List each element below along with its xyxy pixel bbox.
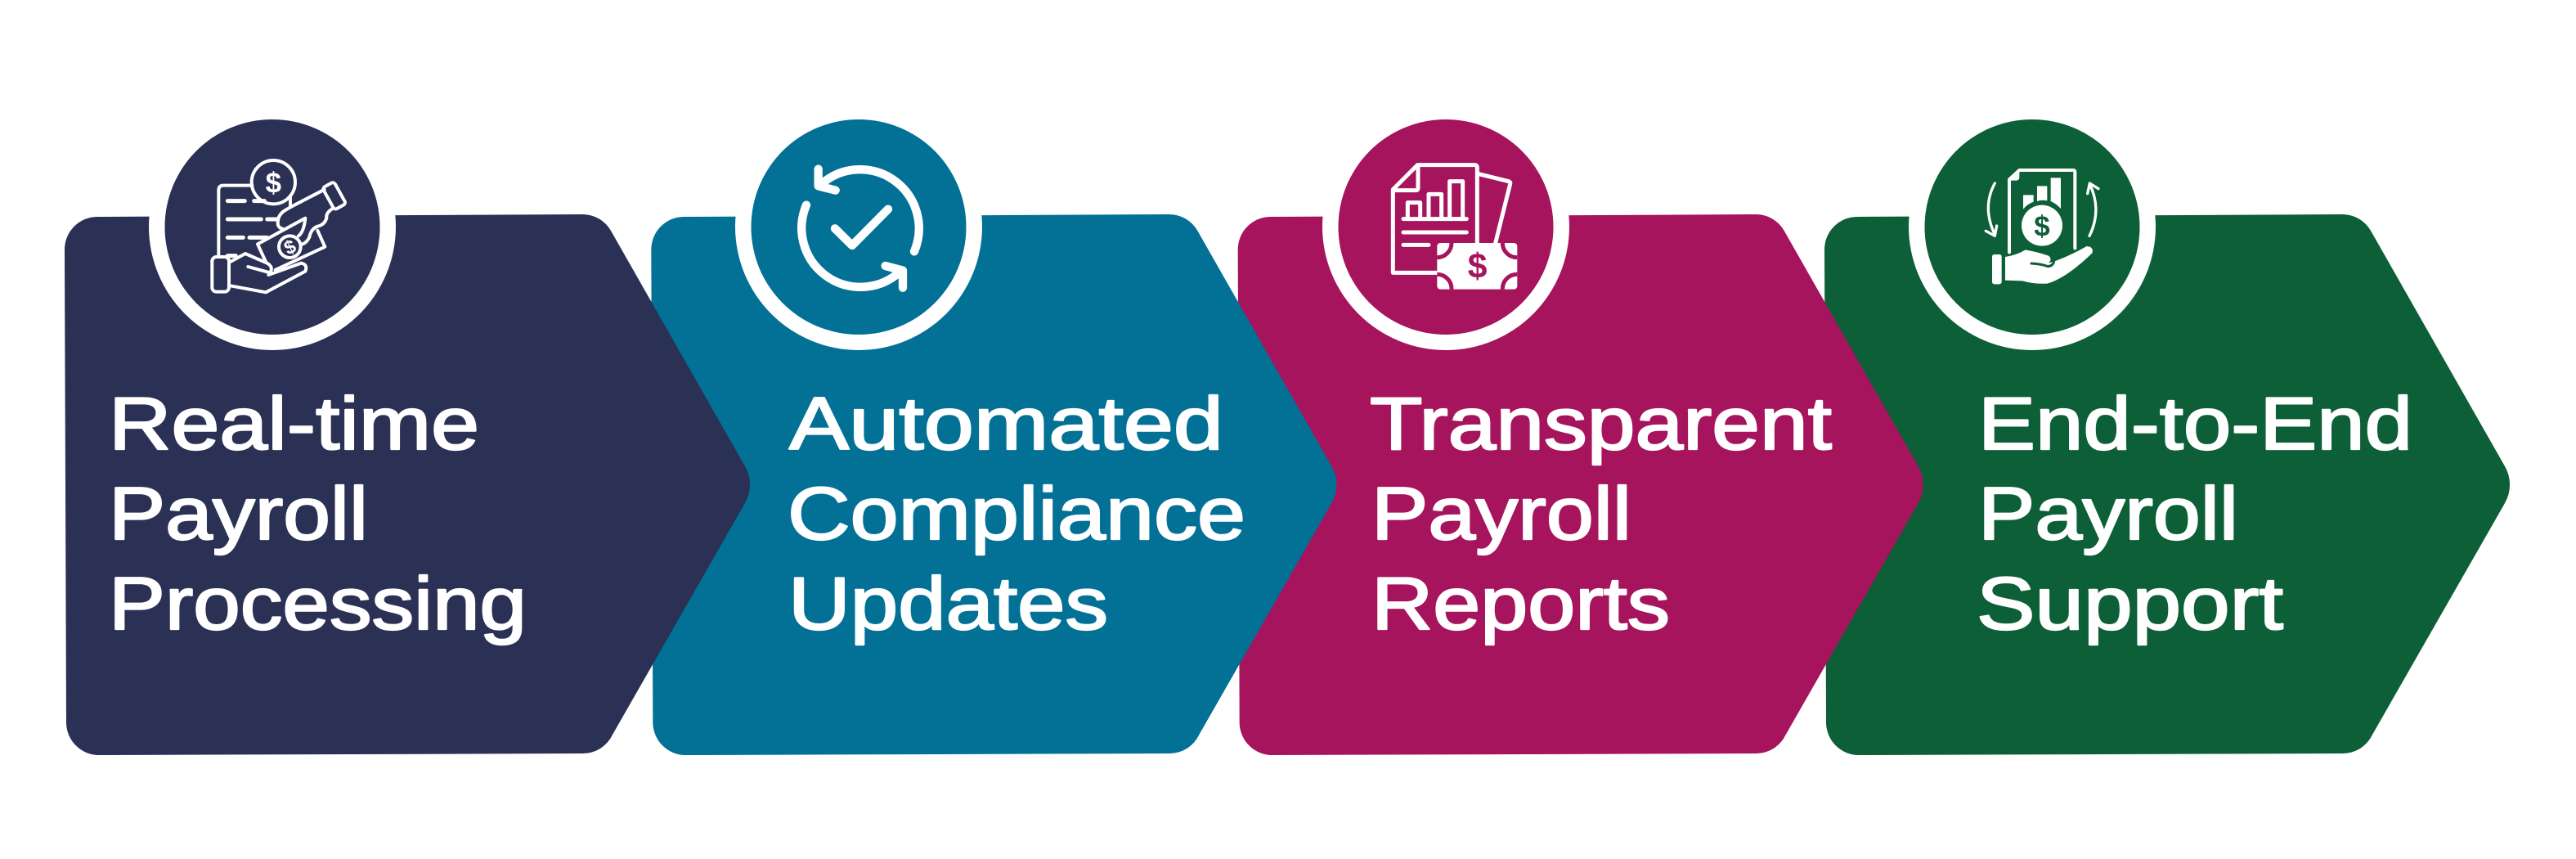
panel: Automated Compliance Updates — [651, 103, 1336, 755]
heading: Real-time Payroll Processing: Processing — [109, 563, 527, 645]
heading: Automated Compliance Updates: Automated — [789, 383, 1223, 465]
panel: Transparent Payroll Reports — [1238, 103, 1923, 755]
icon: circular arrows with check mark — [801, 169, 919, 288]
icon badge: compliance — [735, 103, 982, 350]
icon: payslip, coin and hands exchanging money: $ — [266, 167, 281, 199]
icon: payslip, coin and hands exchanging money: $ — [280, 235, 299, 259]
heading: Transparent Payroll Reports — [1370, 383, 1832, 645]
heading: Transparent Payroll Reports: Transparent — [1370, 383, 1832, 465]
heading: Automated Compliance Updates: Compliance — [788, 473, 1245, 555]
heading: Transparent Payroll Reports: Reports — [1371, 563, 1670, 645]
heading: Real-time Payroll Processing: Payroll — [109, 473, 368, 555]
heading: Real-time Payroll Processing — [109, 383, 527, 645]
icon: payslip, coin and hands exchanging money — [212, 160, 346, 292]
icon badge: support — [1909, 103, 2156, 350]
icon: report with bar chart and banknote — [1393, 165, 1517, 290]
icon: report and coin on open hand — [1986, 170, 2098, 284]
panel: End-to-End Payroll Support — [1824, 103, 2510, 755]
heading: End-to-End Payroll Support: End-to-End — [1978, 383, 2412, 465]
icon: report with bar chart and banknote: $ — [1468, 246, 1488, 286]
panel: Real-time Payroll Processing — [65, 103, 750, 755]
icon badge: processing — [149, 103, 396, 350]
icon badge: reports — [1322, 103, 1569, 350]
heading: Automated Compliance Updates — [788, 383, 1245, 645]
heading: Real-time Payroll Processing: Real-time — [109, 383, 479, 465]
heading: Transparent Payroll Reports: Payroll — [1371, 473, 1631, 555]
icon: report and coin on open hand: $ — [2034, 210, 2050, 242]
heading: End-to-End Payroll Support — [1977, 383, 2412, 645]
heading: Automated Compliance Updates: Updates — [788, 563, 1108, 645]
heading: End-to-End Payroll Support: Support — [1977, 563, 2283, 645]
heading: End-to-End Payroll Support: Payroll — [1978, 473, 2238, 555]
